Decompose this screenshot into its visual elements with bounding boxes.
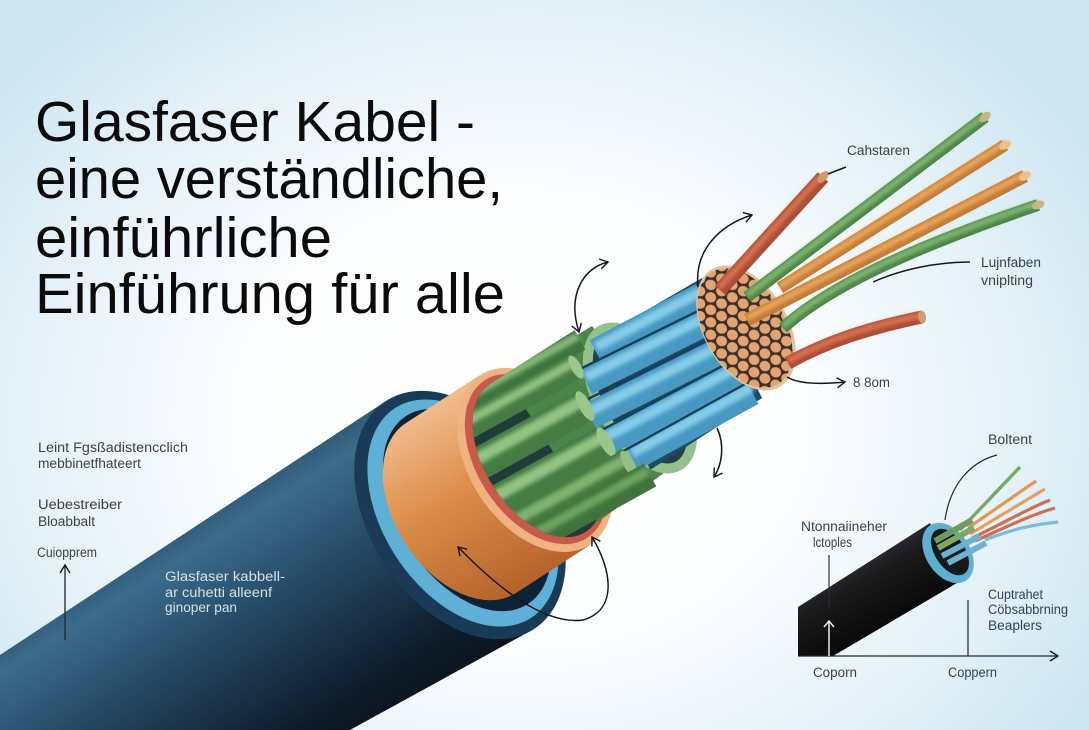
mini white arrow (824, 621, 834, 656)
mini labels: lctoples (813, 535, 852, 550)
orange sleeve (383, 339, 645, 600)
mini cable diagram (798, 432, 1068, 680)
fibre: red upper (719, 169, 831, 290)
green tube bundle (459, 336, 650, 538)
jacket caption: ar cuhetti alleenf (165, 585, 272, 600)
mini cable wires (935, 467, 1058, 563)
title: Einführung für alle (35, 262, 505, 326)
main cable: outer jacket (0, 352, 610, 730)
fibre: red lower (788, 310, 927, 363)
jacket caption (165, 569, 285, 615)
green rod 5 (512, 448, 641, 527)
fibre: green lower (783, 199, 1045, 328)
fibre labels (847, 143, 1041, 390)
green sheath ring (506, 310, 714, 522)
green rod 6 (534, 471, 650, 538)
left labels: Cuiopprem (37, 545, 97, 560)
title: einführliche (35, 206, 332, 270)
green rod 3 (468, 389, 598, 469)
fibre labels: vniplting (981, 273, 1033, 288)
arrow: downward right of bundle (714, 428, 722, 477)
mini labels: Cuptrahet (988, 587, 1043, 602)
left labels (37, 440, 188, 560)
green rod 1 (464, 336, 580, 403)
left labels: mebbinetfhateert (38, 456, 141, 471)
mini labels: Coppern (948, 665, 997, 680)
jacket caption: Glasfaser kabbell- (165, 569, 285, 584)
mini labels: Cöbsabbrning (988, 602, 1068, 617)
arrow: double-headed green sheath (575, 262, 608, 332)
green rod 4 (489, 425, 619, 505)
fibre labels: Cahstaren (847, 143, 910, 158)
fibre labels: Lujnfaben (981, 255, 1041, 270)
fibre: green upper (747, 110, 993, 297)
arrow: around copper bundle (698, 215, 752, 287)
arrow: to dimension label (787, 377, 845, 383)
mini leaders (829, 455, 997, 656)
mini labels (801, 432, 1068, 680)
mini labels: Coporn (813, 665, 857, 680)
arrow: vertical left (64, 565, 66, 640)
fibre labels: 8 8om (853, 375, 890, 390)
mini labels: Beaplers (988, 618, 1042, 633)
fibre: orange lower (747, 169, 1033, 320)
left labels: Bloabbalt (38, 514, 95, 529)
title: Glasfaser Kabel - (35, 90, 475, 154)
mini labels: Boltent (988, 432, 1032, 447)
fibre: orange upper (780, 138, 1013, 288)
leader: top fibre (828, 167, 846, 174)
leader: green fibre (873, 262, 970, 282)
title: eine verständliche, (35, 147, 503, 211)
copper fibre bundle (676, 248, 816, 408)
mini cable axis (798, 655, 1058, 657)
blue tube bundle (582, 278, 762, 470)
left labels: Uebestreiber (38, 497, 123, 512)
title (35, 90, 505, 326)
mini cable body (798, 513, 984, 656)
arrows on main cable (458, 167, 970, 620)
left labels: Leint Fgsßadistencclich (38, 440, 188, 455)
green rod 2 (459, 353, 587, 430)
mini labels: Ntonnaiineher (801, 519, 888, 534)
jacket caption: ginoper pan (165, 600, 237, 615)
coloured fibres (719, 110, 1045, 363)
arrow: looping under sleeve (458, 537, 608, 620)
